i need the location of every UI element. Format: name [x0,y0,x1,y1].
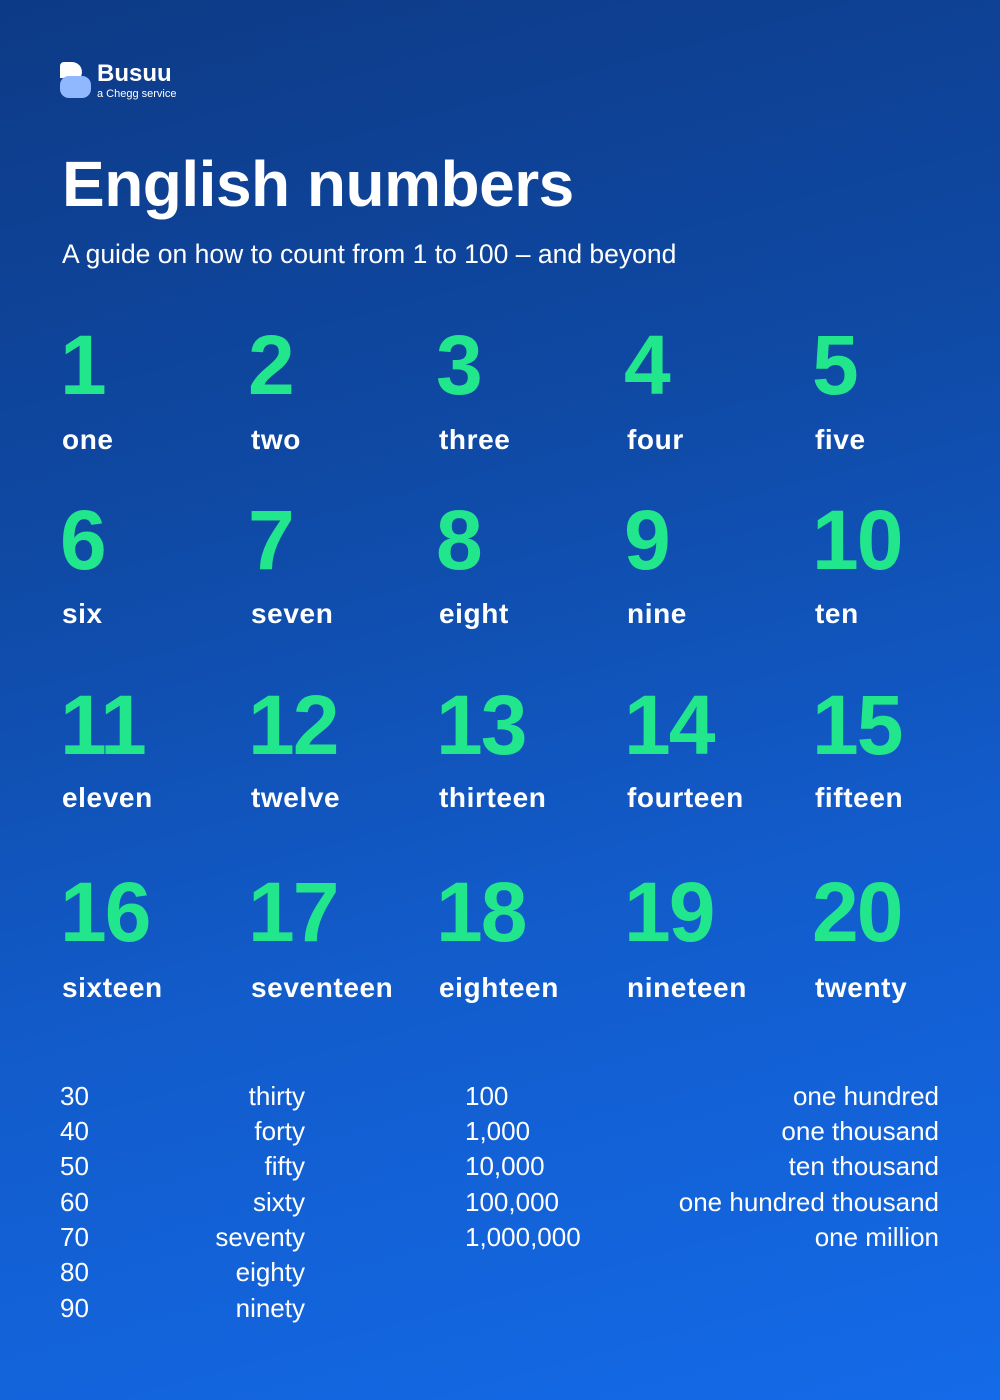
number grid 1-20: sixteen [62,972,163,1003]
number grid 1-20: 5 [812,318,857,412]
tens list: thirty [249,1081,305,1111]
number grid 1-20: 14 [624,678,713,772]
number grid 1-20: nine [627,598,687,629]
number grid 1-20: 10 [812,493,901,587]
large numbers list: 100,000 [465,1187,559,1217]
large numbers list: one hundred thousand [679,1187,939,1217]
logo text: Busuu [97,60,172,87]
number grid 1-20: twelve [251,782,340,813]
number grid 1-20: 2 [248,318,293,412]
number grid 1-20: 13 [436,678,525,772]
number grid 1-20: fourteen [627,782,744,813]
tens list: 40 [60,1116,89,1146]
large numbers list [465,1081,939,1252]
number grid 1-20: eighteen [439,972,559,1003]
tens list: eighty [236,1257,305,1287]
number grid 1-20: five [815,424,866,455]
logo tagline: a Chegg service [97,88,176,100]
tens list: 80 [60,1257,89,1287]
tens list: seventy [215,1222,305,1252]
number grid 1-20: fifteen [815,782,903,813]
number grid 1-20: four [627,424,684,455]
number grid 1-20: 20 [812,865,901,959]
number grid 1-20: 3 [436,318,481,412]
tens list: 90 [60,1293,89,1323]
number grid 1-20: 15 [812,678,901,772]
number grid 1-20: twenty [815,972,907,1003]
number grid 1-20: 12 [248,678,337,772]
tens list: sixty [253,1187,305,1217]
number grid 1-20: nineteen [627,972,747,1003]
number grid 1-20: one [62,424,114,455]
large numbers list: one hundred [793,1081,939,1111]
number grid 1-20: 1 [60,318,105,412]
number grid 1-20: two [251,424,301,455]
number grid 1-20: three [439,424,510,455]
tens list: 70 [60,1222,89,1252]
tens list: 50 [60,1151,89,1181]
number grid 1-20: 16 [60,865,149,959]
subtitle: A guide on how to count from 1 to 100 – and beyond [62,239,676,269]
number grid 1-20: 9 [624,493,669,587]
logo [60,60,176,100]
number grid 1-20: eight [439,598,509,629]
number grid 1-20: 11 [60,678,145,772]
large numbers list: 1,000 [465,1116,530,1146]
title: English numbers [62,148,574,220]
large numbers list: ten thousand [789,1151,939,1181]
number grid 1-20: 4 [624,318,669,412]
number grid 1-20 [60,318,907,1003]
number grid 1-20: 19 [624,865,713,959]
tens list: ninety [236,1293,305,1323]
large numbers list: 1,000,000 [465,1222,581,1252]
large numbers list: one million [815,1222,939,1252]
number grid 1-20: seventeen [251,972,393,1003]
tens list: 30 [60,1081,89,1111]
number grid 1-20: ten [815,598,859,629]
number grid 1-20: 7 [248,493,293,587]
tens list [60,1081,305,1323]
large numbers list: 10,000 [465,1151,545,1181]
number grid 1-20: 8 [436,493,481,587]
number grid 1-20: thirteen [439,782,546,813]
tens list: 60 [60,1187,89,1217]
number grid 1-20: 6 [60,493,105,587]
tens list: fifty [265,1151,305,1181]
number grid 1-20: 17 [248,865,337,959]
tens list: forty [254,1116,305,1146]
number grid 1-20: eleven [62,782,153,813]
icon: busuu logo [60,62,91,98]
large numbers list: 100 [465,1081,508,1111]
large numbers list: one thousand [781,1116,939,1146]
number grid 1-20: 18 [436,865,525,959]
number grid 1-20: six [62,598,103,629]
number grid 1-20: seven [251,598,333,629]
